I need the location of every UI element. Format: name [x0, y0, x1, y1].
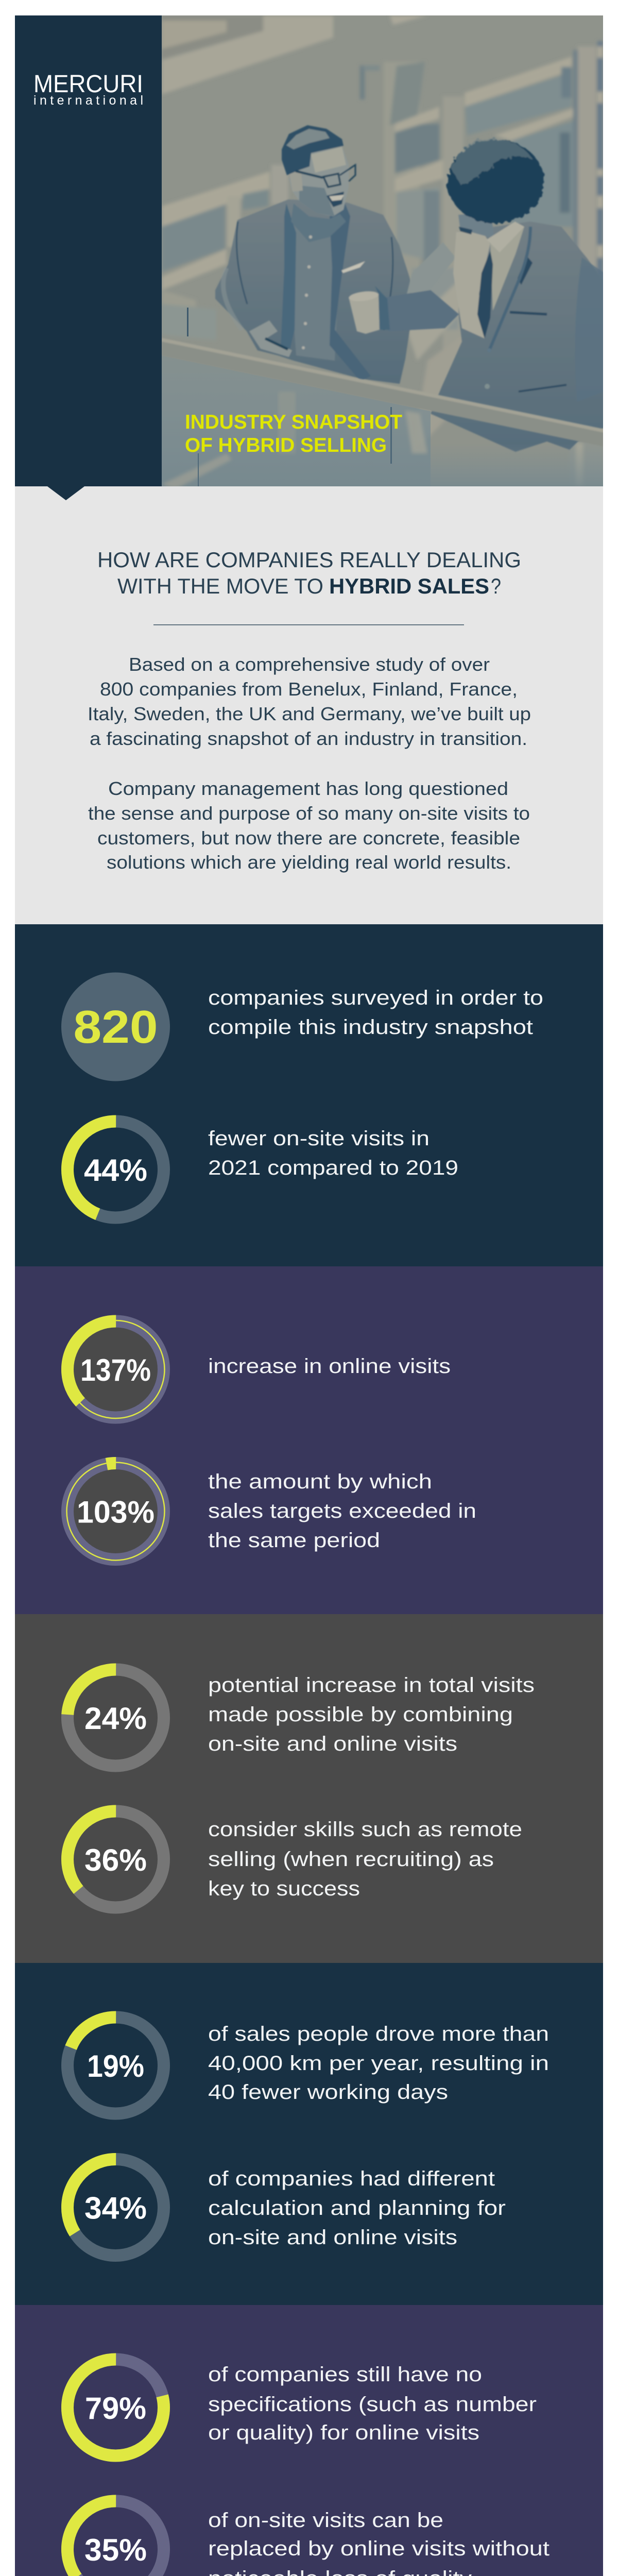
text: 79%: or quality) for online visits — [208, 2421, 479, 2444]
text: 820: compile this industry snapshot — [208, 1016, 533, 1039]
stat circle: 820: 820 — [73, 1002, 158, 1053]
donut: 35%: 35% — [84, 2533, 147, 2567]
intro paragraph one: Italy, Sweden, the UK and Germany, we’ve built up — [88, 703, 531, 724]
text: 36% — [208, 1818, 522, 1900]
text: 820 — [208, 987, 543, 1039]
blurred window architecture — [162, 15, 603, 486]
text: 19% — [208, 2023, 549, 2104]
intro paragraph one — [88, 654, 531, 749]
text: 44%: fewer on-site visits in — [208, 1127, 430, 1150]
text: 36%: selling (when recruiting) as — [208, 1848, 494, 1871]
text: 34%: calculation and planning for — [208, 2197, 506, 2219]
intro paragraph two: Company management has long questioned — [108, 778, 508, 799]
text: 24% — [208, 1674, 535, 1755]
donut: 19%: 19% — [87, 2049, 144, 2083]
handrail — [162, 338, 605, 447]
intro paragraph one: Based on a comprehensive study of over — [129, 654, 490, 675]
heading: HOW ARE COMPANIES REALLY DEALING — [97, 548, 521, 572]
text: 24%: made possible by combining — [208, 1703, 513, 1726]
heading — [97, 548, 521, 598]
text: 44% — [208, 1127, 458, 1179]
man on the right — [348, 138, 605, 452]
photo title: INDUSTRY SNAPSHOT — [185, 411, 402, 433]
donut: 137%: 137% — [80, 1353, 151, 1387]
intro paragraph two: solutions which are yielding real world results. — [107, 852, 511, 873]
text: 44%: 2021 compared to 2019 — [208, 1157, 458, 1179]
photo title — [185, 411, 402, 456]
text: 103% — [208, 1470, 476, 1552]
heading: ? — [491, 574, 501, 598]
photo title: OF HYBRID SELLING — [185, 434, 387, 456]
donut: 79% — [67, 2360, 164, 2455]
donut: 103%: 103% — [77, 1495, 154, 1529]
panel: purple stats 2 — [15, 2305, 603, 2576]
text: 79%: of companies still have no — [208, 2363, 482, 2386]
text: 103%: the amount by which — [208, 1470, 432, 1493]
text: 137%: increase in online visits — [208, 1355, 451, 1378]
heading: WITH THE MOVE TO — [117, 574, 323, 598]
donut: 19% — [67, 2018, 164, 2113]
intro paragraph two: customers, but now there are concrete, feasible — [97, 827, 520, 849]
intro paragraph two: the sense and purpose of so many on-site visits to — [88, 803, 530, 824]
text: 79% — [208, 2363, 537, 2444]
text: 820: companies surveyed in order to — [208, 987, 543, 1009]
haze below the handrail — [162, 355, 603, 489]
text: 35%: replaced by online visits without — [208, 2537, 550, 2560]
text: 34% — [208, 2167, 506, 2249]
panel: purple stats 1 — [15, 1266, 603, 1614]
text: 34%: on-site and online visits — [208, 2226, 457, 2249]
intro paragraph one: 800 companies from Benelux, Finland, France, — [100, 679, 518, 700]
donut: 36%: 36% — [84, 1843, 147, 1877]
text: 24%: on-site and online visits — [208, 1733, 457, 1755]
man on the left — [215, 125, 412, 384]
donut: 44% — [67, 1121, 164, 1218]
donut: 35% — [67, 2501, 164, 2576]
panel: grey stats — [15, 1614, 603, 1963]
intro paragraph one: a fascinating snapshot of an industry in transition. — [90, 728, 527, 749]
donut: 24% — [67, 1669, 164, 1766]
icon: chevron pointer — [47, 486, 84, 500]
donut: 103% — [67, 1462, 165, 1560]
header photo: two businessmen on a staircase — [162, 15, 605, 489]
donut: 34% — [67, 2159, 164, 2256]
panel: introduction — [15, 486, 603, 924]
navy logo panel — [15, 15, 162, 486]
heading: HYBRID SALES — [329, 574, 489, 598]
text: 36%: consider skills such as remote — [208, 1818, 522, 1841]
donut: 79%: 79% — [85, 2391, 146, 2426]
text: 79%: specifications (such as number — [208, 2393, 537, 2416]
donut: 24%: 24% — [84, 1701, 147, 1736]
intro paragraph two — [88, 778, 530, 873]
stat circle: 820 — [61, 973, 170, 1081]
text: 24%: potential increase in total visits — [208, 1674, 535, 1697]
text: 36%: key to success — [208, 1877, 360, 1900]
text: 103%: the same period — [208, 1529, 380, 1552]
text: 35%: of on-site visits can be — [208, 2509, 443, 2532]
text: 19%: 40 fewer working days — [208, 2081, 448, 2104]
logo: Mercuri International: international — [33, 93, 143, 108]
donut: 137% — [67, 1320, 165, 1418]
panel: navy stats 2 — [15, 1963, 603, 2305]
donut: 44%: 44% — [84, 1153, 147, 1188]
panel: navy stats 1 — [15, 924, 603, 1266]
text: 19%: of sales people drove more than — [208, 2023, 549, 2045]
text: 34%: of companies had different — [208, 2167, 495, 2190]
text: 19%: 40,000 km per year, resulting in — [208, 2052, 549, 2075]
donut: 36% — [67, 1811, 164, 1907]
text: 103%: sales targets exceeded in — [208, 1500, 476, 1522]
text: 35% — [208, 2509, 550, 2576]
logo: Mercuri International: MERCURI — [33, 71, 143, 98]
donut: 34%: 34% — [84, 2191, 147, 2226]
